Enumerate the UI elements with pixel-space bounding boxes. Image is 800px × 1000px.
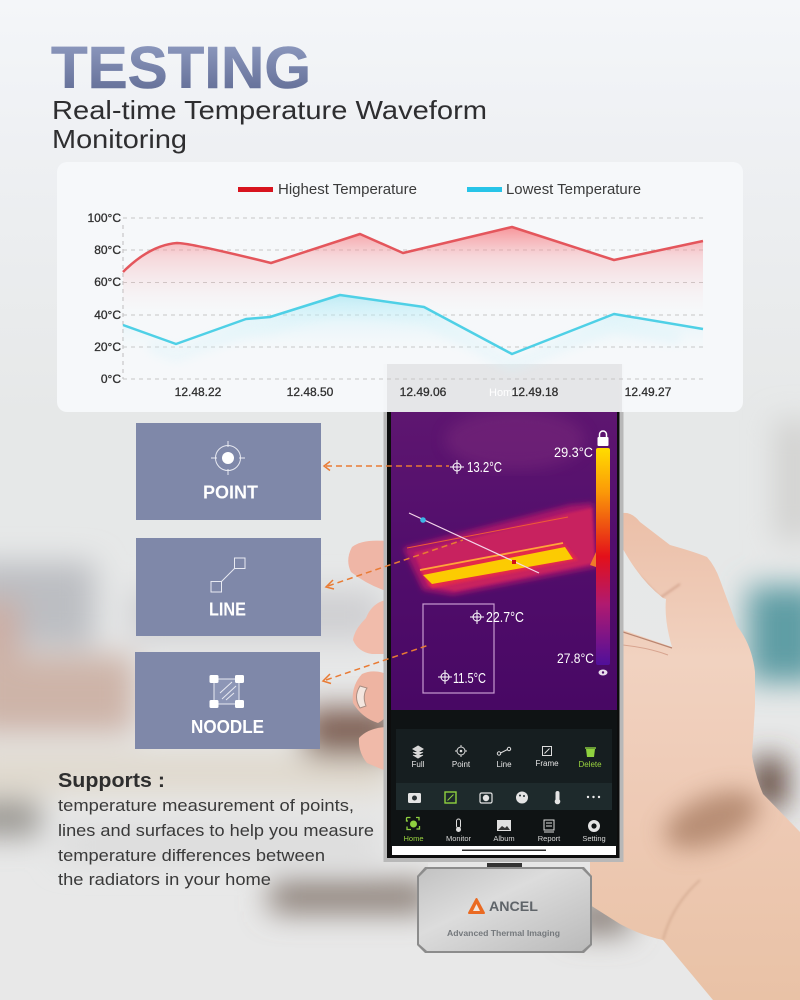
phone	[384, 364, 624, 862]
phone body	[384, 364, 624, 862]
screen: thermal image	[391, 410, 617, 710]
x axis labels: 12.49.18	[512, 385, 559, 399]
x axis labels	[175, 385, 672, 399]
legend: Lowest Temperature	[506, 182, 641, 198]
max and min labels	[554, 445, 594, 666]
icon: noodle frame	[210, 675, 244, 708]
nav: Report: Report	[538, 834, 561, 843]
reading 11.5: 11.5°C	[453, 671, 486, 687]
arrow: line	[326, 540, 463, 589]
reading 13.2: 13.2°C	[467, 460, 502, 476]
supports description: lines and surfaces to help you measure	[58, 821, 374, 840]
subtitle	[52, 95, 487, 154]
lowest temperature series	[123, 295, 703, 365]
supports description	[58, 796, 374, 889]
tool: Line: Line	[496, 760, 512, 769]
y axis labels: 80°C	[94, 243, 121, 257]
nav: Home: Home	[403, 834, 424, 843]
arrow: noodle	[323, 645, 429, 684]
phone ghost over chart	[387, 364, 622, 412]
max and min labels: 29.3°C	[554, 445, 593, 460]
row icons	[408, 791, 600, 804]
x axis labels: 12.49.06	[400, 385, 447, 399]
icon: eye	[598, 670, 608, 676]
fingers on the left of the phone	[348, 541, 392, 771]
icon: point target	[211, 441, 245, 475]
supports description: temperature differences between	[58, 846, 325, 865]
subtitle: Real-time Temperature Waveform	[52, 95, 487, 125]
reading 11.5	[438, 670, 486, 687]
icon: lock	[598, 431, 608, 446]
max and min labels: 27.8°C	[557, 651, 594, 666]
supports heading: Supports :	[58, 770, 165, 792]
nav: Setting	[582, 822, 606, 843]
nav: Home	[403, 818, 424, 843]
nav: Album	[493, 820, 515, 843]
hand: palm and thumb	[590, 513, 800, 1000]
highest temperature series	[123, 227, 703, 312]
arrow: point	[324, 462, 449, 470]
reading 22.7	[470, 610, 524, 626]
card: line	[136, 538, 321, 636]
thermal imaging device	[417, 863, 592, 953]
tool: Point: Point	[452, 760, 471, 769]
nav: Report	[538, 820, 561, 843]
x axis labels: 12.48.22	[175, 385, 222, 399]
title: TESTING	[51, 35, 311, 101]
frame measurement	[423, 604, 494, 693]
tool: Frame	[535, 746, 559, 768]
y axis labels: 20°C	[94, 340, 121, 354]
ANCEL logo	[469, 898, 538, 914]
tool: Full: Full	[412, 760, 425, 769]
reading 22.7: 22.7°C	[486, 610, 524, 626]
app toolbar	[391, 710, 617, 855]
supports description: the radiators in your home	[58, 870, 271, 889]
tool: Line	[496, 747, 512, 769]
tool: Delete	[578, 748, 602, 769]
tool: Point	[452, 745, 471, 769]
home indicator bar	[392, 846, 616, 855]
reading 13.2	[450, 460, 502, 476]
card: point: POINT	[203, 482, 259, 502]
tool: Delete: Delete	[578, 760, 602, 769]
phone ghost over chart: Home	[489, 387, 518, 399]
tool: Frame: Frame	[535, 759, 559, 768]
air conditioner heat shape	[403, 503, 597, 595]
card: noodle	[135, 652, 320, 749]
temperature scale bar	[596, 448, 610, 665]
nav: Setting: Setting	[582, 834, 606, 843]
line measurement	[409, 513, 539, 573]
icon: line segment	[211, 558, 245, 592]
card: line: LINE	[209, 598, 246, 620]
tool: Full	[412, 746, 425, 769]
nav: Album: Album	[493, 834, 515, 843]
subtitle: Monitoring	[52, 124, 187, 154]
legend	[238, 182, 641, 198]
ANCEL logo: ANCEL	[489, 898, 538, 914]
y axis labels	[88, 211, 121, 386]
y axis labels: 100°C	[88, 211, 121, 225]
supports description: temperature measurement of points,	[58, 796, 354, 815]
y axis labels: 40°C	[94, 308, 121, 322]
card: noodle: NOODLE	[191, 716, 264, 737]
x axis labels: 12.49.27	[625, 385, 672, 399]
panel: temperature chart	[57, 162, 743, 412]
card: point	[136, 423, 321, 520]
y axis labels: 0°C	[101, 372, 121, 386]
nav: Monitor: Monitor	[446, 834, 472, 843]
nav: Monitor	[446, 819, 472, 843]
x axis labels: 12.48.50	[287, 385, 334, 399]
legend: Highest Temperature	[278, 182, 417, 198]
device tagline: Advanced Thermal Imaging	[447, 928, 560, 938]
y axis labels: 60°C	[94, 275, 121, 289]
